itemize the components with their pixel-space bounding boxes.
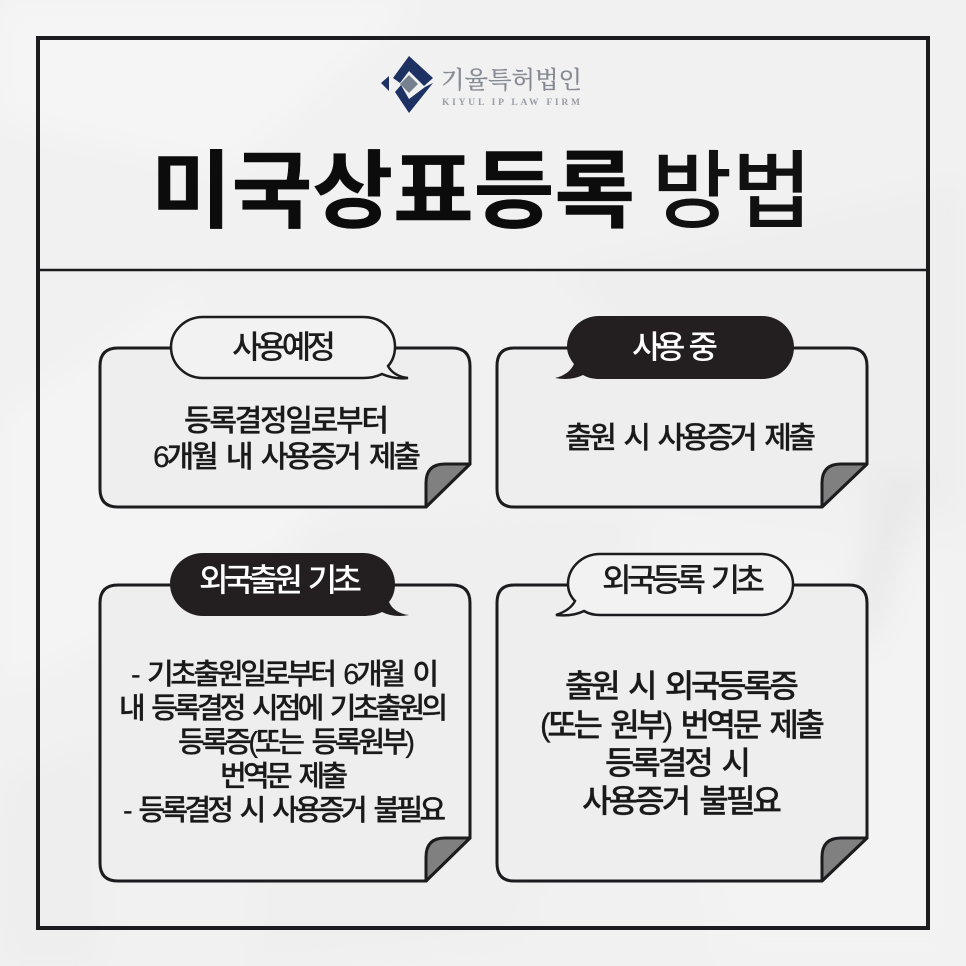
card body <box>497 585 867 881</box>
title: 미국상표등록 <box>151 145 635 240</box>
logo name: 기율특허법인 <box>441 67 582 94</box>
body text: - 기초출원일로부터 6개월 이 <box>131 658 439 691</box>
page fold <box>426 464 470 507</box>
body text: 출원 시 사용증거 제출 <box>565 422 816 455</box>
body text: 번역문 제출 <box>220 760 348 793</box>
label text: 사용예정 <box>232 329 336 365</box>
logo <box>381 56 582 113</box>
body text <box>119 658 448 827</box>
label pill <box>555 316 794 379</box>
body text: - 등록결정 시 사용증거 불필요 <box>123 794 446 827</box>
page fold <box>426 838 470 881</box>
logo subtitle: KIYUL IP LAW FIRM <box>442 98 580 108</box>
card body <box>497 348 867 507</box>
title: 방법 <box>652 145 812 240</box>
body text: 등록증(또는 등록원부) <box>178 726 415 759</box>
icon: diamond logo mark <box>381 56 433 113</box>
label text: 외국등록 기초 <box>602 562 765 598</box>
body text: 등록결정 시 <box>605 745 751 781</box>
body text: (또는 원부) 번역문 제출 <box>540 707 825 743</box>
body text: 등록결정일로부터 <box>184 405 389 438</box>
panel: 외국등록 기초 <box>497 554 867 881</box>
card body <box>100 348 470 507</box>
label pill <box>170 553 409 616</box>
body text: 6개월 내 사용증거 제출 <box>153 441 421 474</box>
panel: 사용예정 <box>100 317 470 507</box>
body text <box>153 405 421 474</box>
body text: 출원 시 외국등록증 <box>565 668 799 704</box>
panel: 외국출원 기초 <box>100 553 470 881</box>
card body <box>100 585 470 881</box>
label pill <box>556 554 793 615</box>
body text <box>540 668 825 819</box>
body text: 내 등록결정 시점에 기초출원의 <box>119 692 448 725</box>
page fold <box>822 464 867 507</box>
panel: 사용 중 <box>497 316 867 507</box>
label text: 외국출원 기초 <box>199 562 362 598</box>
label text: 사용 중 <box>632 329 718 365</box>
body text: 사용증거 불필요 <box>582 783 782 819</box>
header divider <box>38 269 928 271</box>
label pill <box>171 317 408 378</box>
page fold <box>822 838 867 881</box>
